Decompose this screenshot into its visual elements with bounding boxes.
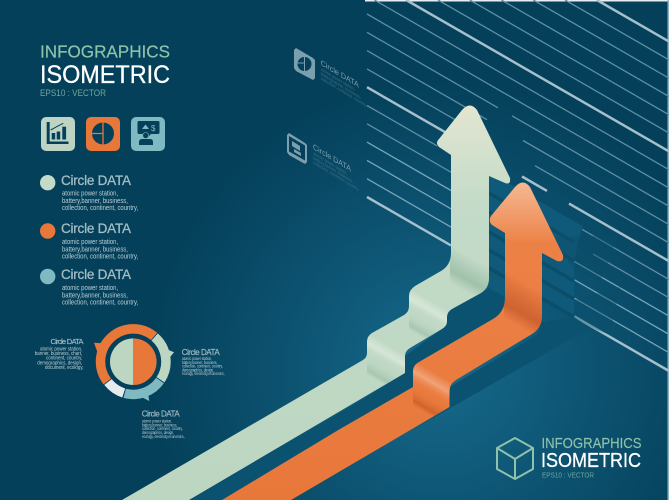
donut caption: right: Circle DATA [182,348,220,357]
list item: orange circle data [40,221,138,261]
donut caption: bottom: atomic power station, [142,419,172,424]
list item: teal circle data: Circle DATA [61,267,131,282]
orange isometric arrow [222,182,563,500]
isometric label: presenter icon: collection, continent, country, [313,159,359,192]
list item: orange circle data: atomic power station, [62,239,118,246]
list item: teal circle data [40,267,138,307]
list item: green circle data: battery,banner, business, [62,198,128,205]
logo: wordmark: EPS10 : VECTOR [542,472,594,480]
title block [40,42,170,99]
list item: orange circle data: battery,banner, business, [62,246,128,254]
list item: teal circle data: atomic power station, [62,285,118,292]
donut caption: right [182,348,225,376]
donut caption: left: continent, country, [46,355,82,362]
icon: presenter with speech bubble [131,117,165,151]
donut caption: bottom: collection, continent, country, [142,427,183,431]
title block: ISOMETRIC [40,61,170,89]
green isometric arrow [122,106,510,500]
arrow shadow panel on wall [489,172,620,335]
list item: green circle data: atomic power station, [62,190,118,198]
donut caption: bottom: demographics, design, [142,431,174,435]
logo: wordmark [541,435,642,480]
isometric label: pie icon: Circle DATA [321,58,359,90]
donut caption: left: document, ecology, [45,365,84,371]
shadow under orange ribbon [412,317,590,430]
isometric label: pie icon [294,48,367,108]
donut caption: left: banner, business, chart, [35,351,82,357]
logo: wordmark: ISOMETRIC [541,450,641,472]
donut caption: bottom: battery,banner, business, [142,423,177,427]
page edge strips [365,0,669,500]
shadow under green ribbon [189,288,505,500]
green segment [155,337,174,380]
isometric label: pie icon: battery,banner, business, [321,71,361,100]
donut caption: bottom: Circle DATA [142,410,180,419]
donut caption: right: collection, continent, country, [182,364,223,369]
list item: green circle data: Circle DATA [61,173,131,188]
donut caption: bottom [142,410,185,439]
donut caption: right: demographics, design, [182,368,214,372]
list item: orange circle data: Circle DATA [61,221,131,236]
donut caption: left: Circle DATA [50,337,84,346]
teal segment [125,380,160,401]
icon: presenter with speech bubble: $ [151,124,156,133]
list item: green circle data: collection, continent, country, [62,205,138,212]
isometric label: presenter icon: atomic power station, [313,150,347,176]
isometric label: presenter icon: battery,banner, business, [313,155,353,184]
donut caption: left: demographics, design, [37,360,82,367]
isometric label: pie icon: atomic power station, [321,66,355,92]
donut caption: right: ecology, electricity,economics, [182,372,225,376]
title block: INFOGRAPHICS [40,42,170,62]
striped isometric wall lines [367,0,669,371]
list item: teal circle data: collection, continent, country, [62,299,138,307]
donut caption: left: atomic power station, [40,346,82,353]
list item: orange circle data: collection, continent, country, [62,253,138,261]
white segment [108,382,124,393]
logo: wordmark: INFOGRAPHICS [542,435,642,452]
donut caption: right: atomic power station, [182,357,212,361]
isometric label: pie icon: collection, continent, country, [321,75,367,108]
donut caption: left [35,337,84,371]
icon: pie chart [86,117,120,151]
icon: bar chart [41,117,75,151]
title block: EPS10 : VECTOR [40,88,106,99]
donut caption: bottom: ecology, electricity,economics, [142,435,185,439]
isometric label: presenter icon: Circle DATA [313,142,351,174]
inner pie [110,338,157,385]
donut chart [94,329,174,401]
list item: green circle data [40,173,138,212]
logo: cube icon [497,438,533,479]
isometric label: presenter icon [287,133,359,192]
list item: teal circle data: battery,banner, business, [62,292,128,300]
donut caption: right: battery,banner, business, [182,360,217,365]
orange segment [94,329,154,382]
